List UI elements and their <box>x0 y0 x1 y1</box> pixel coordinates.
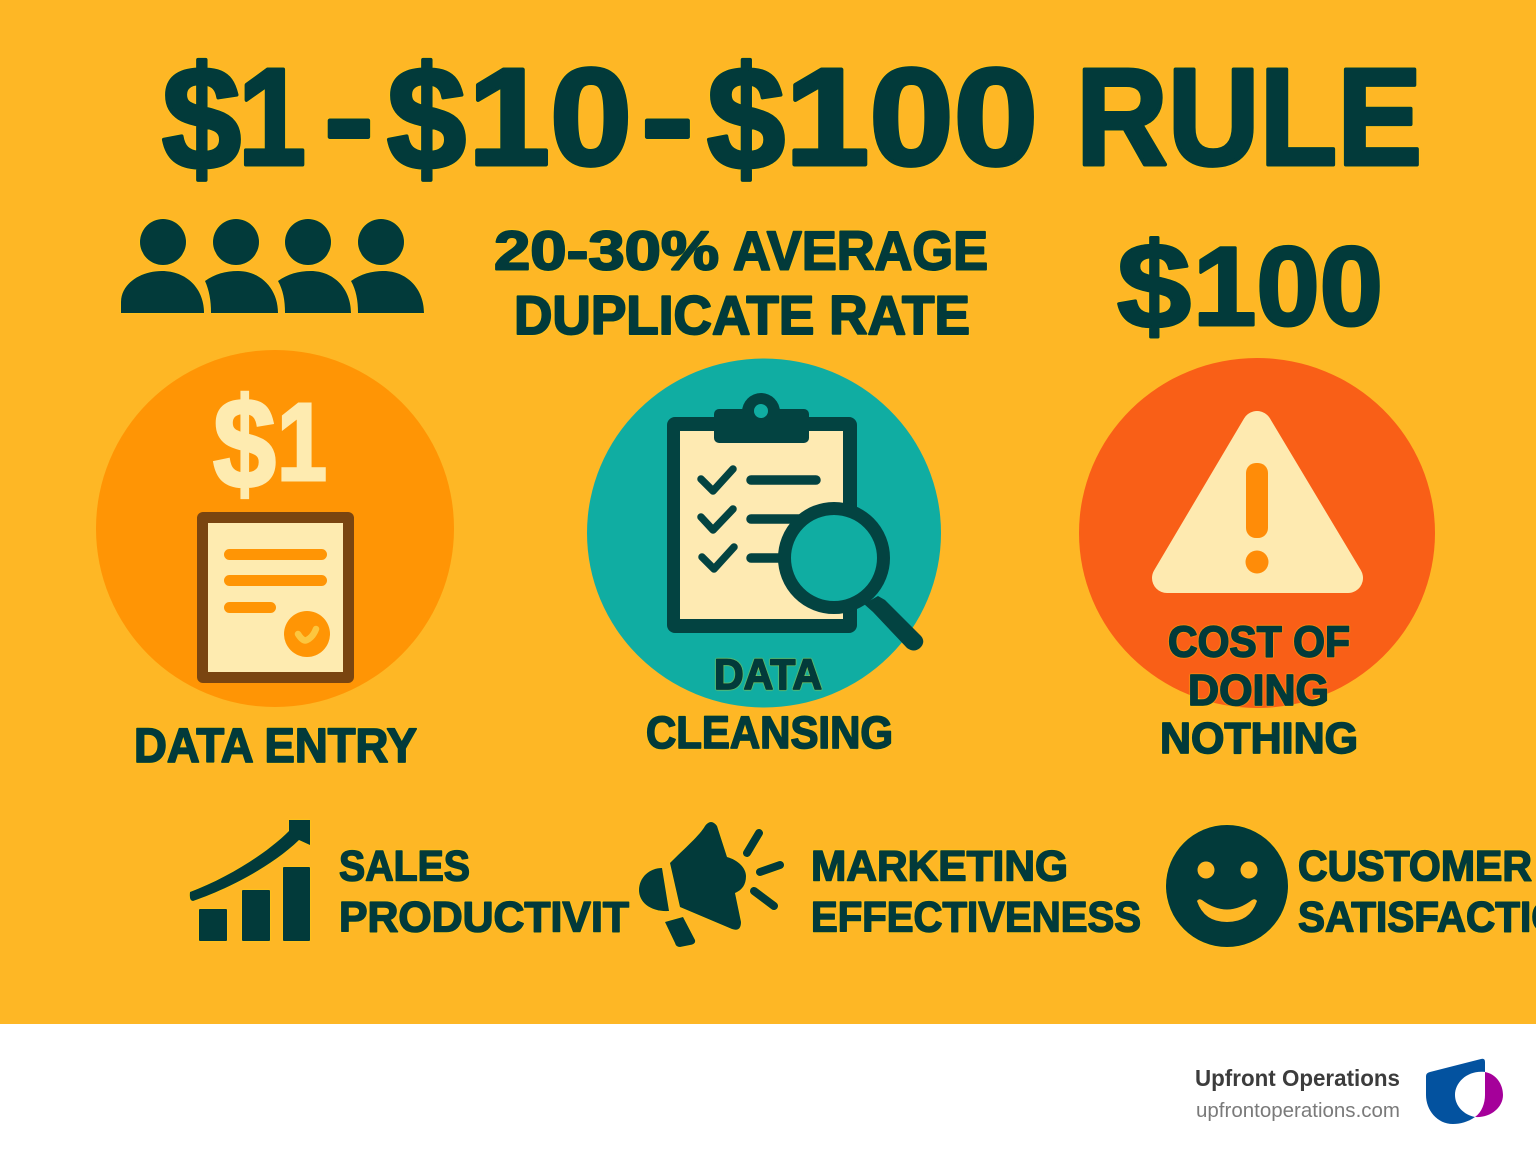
brand name: Upfront Operations <box>1195 1065 1400 1091</box>
cost of doing nothing label: COST OF <box>1168 618 1350 666</box>
cost of doing nothing label: DOING <box>1188 666 1329 715</box>
marketing effectiveness label <box>811 842 1141 942</box>
icon: group of people <box>121 219 424 313</box>
customer satisfaction label <box>1298 842 1536 942</box>
icon: warning triangle <box>1167 426 1348 578</box>
duplicate rate heading: 20-30% <box>494 220 719 282</box>
$100 figure: $ <box>1117 218 1191 354</box>
marketing effectiveness label: EFFECTIVENESS <box>811 894 1141 942</box>
icon: magnifying glass <box>784 508 923 650</box>
red circle <box>1079 358 1435 708</box>
icon: megaphone <box>639 822 780 947</box>
$1 figure: 1 <box>277 381 327 504</box>
data cleansing label <box>646 651 893 758</box>
sales productivity label: PRODUCTIVIT <box>339 894 629 942</box>
title: 10 <box>468 40 632 194</box>
panel: sales productivity <box>190 820 629 942</box>
brand url: upfrontoperations.com <box>1196 1100 1400 1122</box>
marketing effectiveness label: MARKETING <box>811 842 1068 890</box>
teal circle <box>587 358 941 708</box>
panel: data entry <box>96 350 454 773</box>
data cleansing label: DATA <box>714 651 822 699</box>
customer satisfaction label: CUSTOMER <box>1298 842 1532 890</box>
panel: cost of doing nothing <box>1079 358 1435 763</box>
panel: marketing effectiveness <box>639 822 1141 947</box>
$100 figure <box>1117 218 1383 354</box>
footer panel <box>0 1024 1536 1154</box>
$1 figure <box>213 372 327 516</box>
orange circle <box>96 350 454 707</box>
title: $ <box>162 37 241 201</box>
data cleansing label: CLEANSING <box>646 707 893 758</box>
$1 figure: $ <box>213 372 276 516</box>
sales productivity label <box>339 842 629 942</box>
cost of doing nothing label: NOTHING <box>1160 714 1358 763</box>
title: RULE <box>1076 40 1422 194</box>
title: 1 <box>238 40 306 194</box>
cost of doing nothing label <box>1160 618 1358 763</box>
duplicate rate heading: AVERAGE <box>733 220 988 282</box>
icon: brand logo <box>1426 1059 1503 1124</box>
title: $ <box>387 37 466 201</box>
title: - <box>324 40 374 194</box>
title: 100 <box>785 40 1038 194</box>
icon: clipboard <box>667 393 857 633</box>
title <box>162 37 1422 201</box>
panel: customer satisfaction <box>1166 825 1536 947</box>
icon: smiley <box>1166 825 1288 947</box>
duplicate rate heading: DUPLICATE RATE <box>514 284 970 346</box>
sales productivity label: SALES <box>339 842 470 890</box>
title: - <box>641 40 694 194</box>
icon: growth chart <box>190 820 310 941</box>
$100 figure: 100 <box>1193 224 1383 349</box>
icon: document <box>197 512 354 683</box>
title: $ <box>707 37 785 201</box>
panel: data cleansing <box>587 358 941 758</box>
data entry label: DATA ENTRY <box>134 720 417 773</box>
duplicate rate heading <box>494 220 988 346</box>
